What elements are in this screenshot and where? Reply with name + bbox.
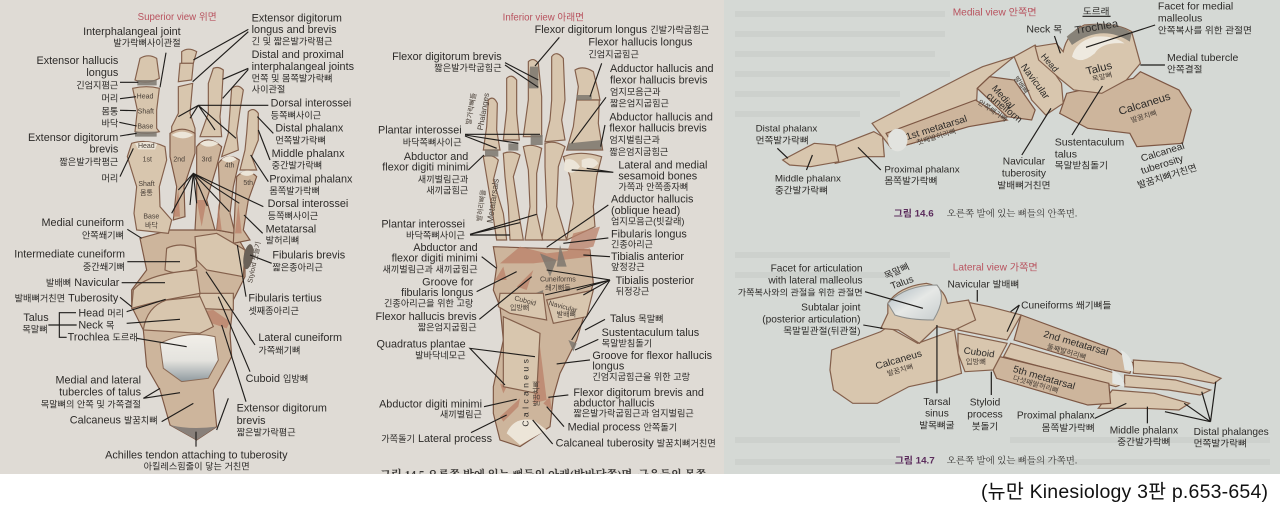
label: styloid process bbox=[967, 372, 1003, 431]
label: subtalar joint: (posterior articulation) bbox=[762, 315, 860, 325]
label: tarsal sinus: 발목뼈굴 bbox=[919, 420, 955, 431]
label: talus bbox=[585, 313, 664, 330]
label: flexor digitorum brevis: 짧은발가락굽힘근 bbox=[434, 62, 502, 73]
label: abductor hallucis and flexor hallucis brevis bbox=[601, 111, 713, 157]
caption: figure 14.7: 오른쪽 발에 있는 뼈들의 가쪽면. bbox=[947, 455, 1077, 465]
label: metatarsal head bbox=[101, 148, 133, 183]
medial foot bones illustration: Head bbox=[1039, 52, 1061, 74]
label: facet for lateral malleolus: Facet for articulation bbox=[771, 264, 863, 274]
lateral foot bones illustration: 입방뼈 bbox=[966, 357, 986, 366]
label: facet for lateral malleolus bbox=[738, 264, 923, 308]
label: tuberosity: 발배뼈거친면 Tuberosity bbox=[15, 293, 119, 305]
medial foot bones illustration: 안쪽쐐기뼈 bbox=[976, 98, 1009, 123]
label: cuboid bbox=[218, 297, 308, 385]
label: calcaneus bbox=[70, 403, 193, 426]
footer white strip bbox=[0, 474, 1280, 514]
label: tibialis posterior: 뒤정강근 bbox=[616, 285, 649, 296]
label: medial and lateral tubercles of talus: tubercles of talus bbox=[59, 387, 142, 399]
label: calcaneal tuberosity: Calcaneal tuberosity 발꿈치뼈거친면 bbox=[556, 438, 716, 450]
superior foot bones illustration: 몸통 bbox=[140, 189, 153, 197]
label: cuboid: Cuboid 입방뼈 bbox=[246, 373, 308, 385]
label: sustentaculum talus: talus bbox=[1055, 150, 1077, 161]
page background: left book page bbox=[0, 0, 724, 474]
label: navicular bbox=[947, 279, 1019, 302]
caption: figure 14.7: 그림 14.7 bbox=[895, 455, 935, 466]
label: navicular: Navicular 발배뼈 bbox=[947, 279, 1019, 290]
label: abductor hallucis and flexor hallucis brevis: 엄지벌림근과 bbox=[609, 134, 660, 145]
inferior foot bones illustration bbox=[464, 54, 603, 447]
label: abductor and flexor digiti minimi lower bbox=[382, 242, 497, 275]
label: adductor hallucis oblique head: Adductor hallucis bbox=[611, 194, 694, 206]
label: fibularis longus: 긴종아리근 bbox=[611, 239, 653, 249]
inferior foot bones illustration: Calcaneus bbox=[521, 356, 531, 427]
medial foot bones illustration: Trochlea bbox=[1074, 18, 1120, 37]
label: cuneiforms: Cuneiforms 쐐기뼈들 bbox=[1021, 300, 1112, 311]
label: medial and lateral tubercles of talus: 목말뼈의 안쪽 및 가쪽결절 bbox=[41, 398, 141, 409]
figure caption clipped at page edge: 그림 14.5 오른쪽 발에 있는 뼈들의 아래(발바닥쪽)면. 근육들의 몸쪽 bbox=[380, 468, 706, 482]
superior foot bones illustration: Shaft bbox=[138, 108, 154, 115]
label: talus: Talus 목말뼈 bbox=[610, 313, 664, 325]
label: plantar interossei upper: 바닥쪽뼈사이근 bbox=[403, 136, 462, 147]
label: facet for lateral malleolus: 가쪽복사와의 관절을 위한 관절면 bbox=[738, 287, 863, 297]
label: proximal phalanx bbox=[1017, 403, 1126, 433]
label: sesamoid bones bbox=[572, 159, 707, 192]
label: sesamoid bones: sesamoid bones bbox=[618, 170, 698, 182]
label: distal phalanges bbox=[1165, 382, 1269, 449]
label: extensor digitorum brevis bbox=[28, 132, 137, 167]
label: middle phalanx: 중간발가락뼈 bbox=[272, 159, 322, 170]
label: flexor digitorum brevis: Flexor digitorum brevis bbox=[392, 51, 502, 63]
label: adductor hallucis oblique head: (oblique head) bbox=[611, 205, 680, 217]
label: quadratus plantae bbox=[377, 339, 535, 385]
label: navicular tuberosity: Navicular bbox=[1003, 157, 1046, 168]
lateral foot bones illustration: 5th metatarsal bbox=[1011, 364, 1076, 392]
label: tarsal sinus: Tarsal bbox=[923, 397, 950, 408]
label: adductor hallucis and flexor hallucis brevis: flexor hallucis brevis bbox=[610, 74, 708, 86]
label: calcaneus: Calcaneus 발꿈치뼈 bbox=[70, 414, 158, 426]
superior foot bones illustration bbox=[127, 49, 258, 440]
label: extensor digitorum brevis: brevis bbox=[89, 143, 119, 155]
lateral foot bones illustration: 발꿈치뼈 bbox=[886, 362, 914, 378]
label: groove for flexor hallucis longus: longus bbox=[592, 361, 625, 373]
label: abductor hallucis and flexor hallucis brevis: Abductor hallucis and bbox=[609, 111, 713, 123]
label: fibularis longus bbox=[563, 229, 687, 249]
lateral foot bones illustration: 목말뼈 bbox=[882, 261, 911, 281]
label: neck bbox=[1026, 24, 1062, 53]
panel: inferior view bbox=[376, 13, 716, 482]
medial foot bones illustration: 발꿈치뼈 bbox=[1129, 108, 1158, 125]
label: abductor digiti minimi: 새끼벌림근 bbox=[440, 409, 482, 420]
label: medial tubercle: Medial tubercle bbox=[1167, 53, 1239, 64]
label: metatarsal: 발허리뼈 bbox=[266, 234, 299, 245]
label: groove for fibularis longus: 긴종아리근을 위한 고랑 bbox=[384, 297, 474, 308]
inferior foot bones illustration: 발허리뼈들 bbox=[474, 188, 488, 222]
label: facet for medial malleolus: 안쪽복사를 위한 관절면 bbox=[1158, 25, 1252, 35]
caption: figure 14.6: 오른쪽 발에 있는 뼈들의 안쪽면. bbox=[947, 208, 1077, 218]
label: groove for fibularis longus bbox=[384, 272, 517, 308]
label: extensor digitorum longus and brevis: longus and brevis bbox=[252, 24, 337, 36]
label: middle phalanx bbox=[258, 130, 345, 170]
label: abductor digiti minimi bbox=[379, 399, 517, 420]
lateral foot bones illustration: Cuboid bbox=[963, 346, 995, 360]
label: medial tubercle: 안쪽결절 bbox=[1167, 64, 1202, 75]
label: facet for medial malleolus bbox=[1086, 2, 1252, 47]
label: flexor digitorum brevis and abductor hallucis bbox=[548, 387, 704, 419]
label: distal and proximal interphalangeal joints: Distal and proximal bbox=[252, 49, 344, 61]
label: facet for medial malleolus: Facet for medial bbox=[1158, 2, 1233, 12]
label: flexor hallucis longus bbox=[588, 36, 693, 97]
heading: superior view: Superior view 위면 bbox=[138, 11, 217, 23]
label: medial cuneiform: 안쪽쐐기뼈 bbox=[82, 229, 124, 240]
label: cuneiforms bbox=[1007, 300, 1112, 332]
label: calcaneal tuberosity: 발꿈치뼈거친면 bbox=[1136, 162, 1198, 190]
label: distal phalanx: 먼쪽발가락뼈 bbox=[275, 134, 326, 145]
label: adductor hallucis and flexor hallucis brevis: Adductor hallucis and bbox=[610, 63, 714, 75]
label: styloid process: Styloid 붓돌기 bbox=[245, 241, 263, 284]
label: fibularis tertius bbox=[237, 245, 322, 316]
medial foot bones illustration: 목말뼈 bbox=[1091, 70, 1113, 84]
lateral foot bones illustration: 다섯째발허리뼈 bbox=[1012, 373, 1060, 395]
label: phalanx head shaft base bbox=[101, 94, 137, 129]
medial foot bones illustration: Navicular bbox=[1018, 62, 1052, 102]
label: subtalar joint: Subtalar joint bbox=[801, 303, 861, 313]
label: dorsal interossei upper: 등쪽뼈사이근 bbox=[271, 109, 321, 120]
label: navicular tuberosity: 발배뼈거친면 bbox=[997, 180, 1051, 190]
label: sustentaculum talus: Sustentaculum talus bbox=[602, 327, 700, 339]
label: abductor and flexor digiti minimi upper bbox=[382, 151, 484, 195]
label: talus head neck trochlea bracket: Trochlea 도르래 bbox=[68, 331, 138, 343]
medial foot bones illustration bbox=[783, 18, 1191, 167]
label: fibularis brevis bbox=[250, 249, 346, 273]
label: quadratus plantae: Quadratus plantae bbox=[377, 339, 466, 351]
label: sesamoid bones: 가쪽과 안쪽종자뼈 bbox=[618, 181, 688, 192]
label: distal and proximal interphalangeal joints: interphalangeal joints bbox=[252, 61, 355, 73]
inferior foot bones illustration: 쐐기뼈들 bbox=[545, 283, 571, 292]
label: flexor digitorum brevis bbox=[392, 51, 538, 87]
label: styloid process: 붓돌기 bbox=[972, 421, 998, 431]
inferior foot bones illustration: 발가락뼈들 bbox=[464, 92, 478, 125]
label: abductor hallucis and flexor hallucis brevis: flexor hallucis brevis bbox=[609, 123, 707, 135]
label: flexor digitorum brevis and abductor hallucis: Flexor digitorum brevis and bbox=[573, 387, 704, 399]
superior foot bones illustration: 1st bbox=[143, 157, 152, 164]
label: flexor digitorum longus bbox=[535, 24, 709, 66]
label: groove for flexor hallucis longus bbox=[557, 350, 713, 382]
label: tibialis posterior bbox=[545, 270, 694, 340]
label: abductor and flexor digiti minimi upper: flexor digiti minimi bbox=[382, 162, 468, 174]
superior foot bones illustration: 5th bbox=[243, 180, 253, 187]
label: sustentaculum talus: 목말받침돌기 bbox=[1055, 160, 1108, 171]
label: middle phalanx bbox=[1110, 407, 1178, 447]
label: tibialis anterior: 앞정강근 bbox=[611, 261, 645, 272]
superior foot bones illustration: 3rd bbox=[202, 157, 212, 164]
medial foot bones illustration: 첫째발허리뼈 bbox=[915, 127, 957, 147]
medial foot bones illustration: Medial bbox=[989, 83, 1016, 111]
label: abductor hallucis and flexor hallucis brevis: 짧은엄지굽힘근 bbox=[609, 146, 668, 157]
label: talus head neck trochlea bracket bbox=[22, 299, 187, 347]
label: sesamoid bones: Lateral and medial bbox=[618, 159, 707, 171]
label: neck: Neck 목 bbox=[1026, 24, 1062, 35]
label: lateral cuneiform: Lateral cuneiform bbox=[258, 332, 342, 344]
medial foot bones illustration: Talus bbox=[1085, 60, 1114, 78]
label: metatarsal head: 머리 bbox=[101, 173, 118, 183]
label: flexor hallucis brevis: Flexor hallucis brevis bbox=[376, 311, 477, 323]
label: calcaneal tuberosity: tuberosity bbox=[1140, 154, 1185, 177]
superior foot bones illustration: Head bbox=[138, 143, 155, 150]
label: abductor and flexor digiti minimi lower: flexor digiti minimi bbox=[392, 253, 478, 265]
label: extensor hallucis longus bbox=[36, 55, 138, 90]
label: abductor and flexor digiti minimi lower: Abductor and bbox=[413, 242, 478, 254]
medial foot bones illustration: 1st metatarsal bbox=[905, 114, 969, 143]
label: subtalar joint bbox=[762, 303, 883, 336]
lateral foot bones illustration: 둘째발허리뼈 bbox=[1046, 342, 1087, 361]
label: fibularis tertius: Fibularis tertius bbox=[248, 293, 322, 305]
label: distal phalanges: 먼쪽발가락뼈 bbox=[1194, 438, 1247, 449]
label: intermediate cuneiform: Intermediate cuneiform bbox=[14, 248, 125, 260]
inferior foot bones illustration: 발배뼈 bbox=[557, 310, 576, 319]
label: abductor and flexor digiti minimi upper: Abductor and bbox=[404, 151, 468, 163]
label: middle phalanx: Middle phalanx bbox=[1110, 426, 1178, 436]
label: proximal phalanx: Proximal phalanx bbox=[269, 173, 353, 185]
label: medial cuneiform bbox=[42, 217, 142, 240]
label: extensor digitorum brevis lower: Extensor digitorum bbox=[237, 402, 327, 414]
label: distal and proximal interphalangeal joints: 사이관절 bbox=[252, 84, 285, 95]
label: middle phalanx bbox=[775, 155, 841, 196]
label: distal phalanges: Distal phalanges bbox=[1194, 427, 1269, 438]
label: extensor hallucis longus: Extensor hallucis bbox=[36, 55, 119, 67]
panel: lateral view bbox=[738, 261, 1269, 466]
inferior foot bones illustration: Phalanges bbox=[476, 92, 491, 131]
superior foot bones illustration: Head bbox=[137, 94, 153, 101]
label: talus head neck trochlea bracket: Head 머리 bbox=[78, 307, 124, 319]
label: proximal phalanx: 몸쪽발가락뼈 bbox=[269, 185, 320, 196]
label: extensor digitorum longus and brevis: 긴 및 짧은발가락폄근 bbox=[252, 36, 333, 47]
inferior foot bones illustration: Navicular bbox=[548, 300, 578, 315]
label: talus head neck trochlea bracket: Neck 목 bbox=[78, 320, 114, 332]
superior foot bones illustration: 2nd bbox=[173, 157, 185, 164]
label: metatarsal: Metatarsal bbox=[266, 224, 316, 236]
label: phalanx head shaft base: 몸통 bbox=[101, 106, 118, 116]
label: navicular: 발배뼈 Navicular bbox=[46, 277, 120, 289]
label: tibialis anterior bbox=[583, 251, 684, 272]
label: abductor and flexor digiti minimi lower: 새끼벌림근과 새끼굽힘근 bbox=[382, 264, 478, 275]
label: proximal phalanx bbox=[858, 147, 960, 186]
label: middle phalanx: 중간발가락뼈 bbox=[1117, 436, 1170, 447]
label: adductor hallucis and flexor hallucis brevis: 엄지모음근과 bbox=[610, 86, 661, 97]
label: distal phalanx bbox=[257, 117, 344, 145]
label: extensor digitorum brevis lower: brevis bbox=[237, 415, 266, 427]
label: quadratus plantae: 발바닥네모근 bbox=[415, 350, 466, 360]
label: fibularis brevis: Fibularis brevis bbox=[272, 249, 346, 261]
label: abductor and flexor digiti minimi upper: 새끼벌림근과 bbox=[418, 174, 469, 185]
label: talus head neck trochlea bracket: Talus bbox=[23, 312, 49, 324]
caption: figure 14.6: 그림 14.6 bbox=[894, 208, 934, 219]
label: medial tubercle bbox=[1140, 53, 1239, 75]
label: fibularis brevis: 짧은종아리근 bbox=[272, 262, 323, 273]
label: flexor hallucis longus: Flexor hallucis longus bbox=[588, 36, 693, 48]
label: achilles tendon: Achilles tendon attaching to tuberosity bbox=[105, 450, 288, 462]
inferior foot bones illustration: Metatarsals bbox=[485, 177, 501, 224]
lateral foot bones illustration: Talus bbox=[889, 274, 915, 292]
label: distal phalanx: Distal phalanx bbox=[275, 123, 344, 135]
label: lateral cuneiform bbox=[206, 272, 342, 356]
label: tibialis anterior: Tibialis anterior bbox=[611, 251, 684, 263]
label: extensor digitorum longus and brevis bbox=[193, 12, 342, 82]
label: phalanx head shaft base: 바닥 bbox=[101, 119, 119, 129]
label: groove for flexor hallucis longus: Groove for flexor hallucis bbox=[592, 350, 713, 362]
label: extensor hallucis longus: 긴엄지폄근 bbox=[76, 79, 118, 90]
label: adductor hallucis oblique head: 엄지모음근(빗갈래) bbox=[611, 215, 684, 226]
label: extensor digitorum brevis lower: 짧은발가락폄근 bbox=[237, 427, 296, 438]
label: styloid process: Styloid bbox=[970, 398, 1000, 409]
label: middle phalanx: Middle phalanx bbox=[272, 148, 345, 160]
label: dorsal interossei upper: Dorsal interossei bbox=[271, 97, 351, 109]
inferior foot bones illustration: 입방뼈 bbox=[510, 303, 529, 312]
label: tarsal sinus: sinus bbox=[925, 409, 949, 420]
label: achilles tendon bbox=[105, 432, 288, 471]
label: plantar interossei upper bbox=[378, 125, 540, 148]
label: groove for fibularis longus: fibularis longus bbox=[401, 287, 474, 299]
label: flexor hallucis brevis: 짧은엄지굽힘근 bbox=[418, 322, 477, 333]
label: flexor hallucis longus: 긴엄지굽힘근 bbox=[588, 48, 639, 59]
label: facet for lateral malleolus: with lateral malleolus bbox=[767, 276, 863, 286]
label: flexor digitorum longus: Flexor digitorum longus 긴발가락굽힘근 bbox=[535, 24, 709, 36]
label: fibularis longus: Fibularis longus bbox=[611, 229, 687, 241]
label: distal phalanx: Distal phalanx bbox=[756, 124, 817, 135]
label: flexor digitorum brevis and abductor hallucis: abductor hallucis bbox=[573, 397, 655, 409]
label: trochlea korean: 도르래 bbox=[1083, 6, 1109, 16]
label: plantar interossei lower: 바닥쪽뼈사이근 bbox=[406, 230, 465, 241]
label: distal and proximal interphalangeal joints bbox=[223, 49, 355, 98]
medial foot bones illustration: Calcaneus bbox=[1117, 91, 1173, 118]
label: medial and lateral tubercles of talus bbox=[41, 375, 180, 409]
label: intermediate cuneiform: 중간쐐기뼈 bbox=[83, 261, 125, 272]
label: styloid process: process bbox=[967, 410, 1003, 421]
panel: superior view bbox=[14, 11, 355, 471]
label: navicular bbox=[46, 277, 165, 289]
label: lateral process: 가쪽돌기 Lateral process bbox=[381, 433, 493, 445]
label: extensor hallucis longus: longus bbox=[86, 67, 119, 79]
label: extensor digitorum brevis: 짧은발가락폄근 bbox=[59, 156, 118, 167]
label: abductor digiti minimi: Abductor digiti minimi bbox=[379, 399, 482, 411]
label: middle phalanx: 중간발가락뼈 bbox=[775, 185, 828, 196]
caption: figure 14.6 bbox=[894, 208, 1077, 219]
label: sustentaculum talus bbox=[1055, 86, 1124, 171]
label: calcaneal tuberosity bbox=[1136, 141, 1198, 190]
lateral foot bones illustration bbox=[830, 261, 1221, 410]
page background: right book page bbox=[724, 0, 1280, 474]
label: groove for fibularis longus: Groove for bbox=[422, 277, 474, 289]
label: distal phalanx bbox=[756, 124, 817, 158]
label: talus head neck trochlea bracket: 목말뼈 bbox=[22, 324, 48, 335]
label: achilles tendon: 아킬레스힘줄이 닿는 거친면 bbox=[144, 460, 250, 471]
label: calcaneal tuberosity bbox=[533, 420, 716, 450]
superior foot bones illustration: 바닥 bbox=[145, 221, 158, 230]
label: middle phalanx: Middle phalanx bbox=[775, 174, 841, 185]
superior foot bones illustration: 4th bbox=[225, 163, 234, 170]
heading: inferior view: Inferior view 아래면 bbox=[503, 13, 584, 24]
label: proximal phalanx: 몸쪽발가락뼈 bbox=[1042, 422, 1095, 433]
superior foot bones illustration: Base bbox=[143, 214, 159, 221]
label: facet for medial malleolus: malleolus bbox=[1158, 14, 1202, 24]
label: extensor digitorum brevis lower bbox=[222, 325, 327, 438]
label: adductor hallucis and flexor hallucis brevis bbox=[572, 63, 714, 143]
label: sustentaculum talus: Sustentaculum bbox=[1055, 138, 1124, 149]
label: dorsal interossei upper bbox=[178, 97, 351, 138]
label: metatarsal bbox=[244, 215, 316, 245]
label: flexor digitorum brevis and abductor hallucis: 짧은발가락굽힘근과 엄지벌림근 bbox=[573, 408, 694, 419]
label: medial process bbox=[547, 407, 677, 433]
label: lateral process bbox=[381, 415, 507, 445]
label: plantar interossei upper: Plantar interossei bbox=[378, 125, 462, 137]
label: groove for flexor hallucis longus: 긴엄지굽힘근을 위한 고랑 bbox=[592, 371, 691, 382]
label: proximal phalanx bbox=[251, 155, 353, 196]
superior foot bones illustration: Base bbox=[137, 123, 153, 130]
inferior foot bones illustration: 발꿈치뼈 bbox=[532, 381, 541, 407]
label: extensor digitorum brevis: Extensor digitorum bbox=[28, 132, 118, 144]
label: phalanx head shaft base: 머리 bbox=[101, 94, 118, 104]
label: proximal phalanx: 몸쪽발가락뼈 bbox=[884, 175, 937, 186]
label: interphalangeal joint bbox=[83, 26, 181, 87]
label: proximal phalanx: Proximal phalanx bbox=[884, 165, 960, 175]
label: adductor hallucis and flexor hallucis brevis: 짧은엄지굽힘근 bbox=[610, 98, 669, 109]
label: adductor hallucis oblique head bbox=[547, 194, 694, 247]
label: medial cuneiform: Medial cuneiform bbox=[42, 217, 124, 229]
label: flexor hallucis brevis bbox=[376, 277, 532, 333]
superior foot bones illustration: Shaft bbox=[138, 181, 155, 188]
label: sustentaculum talus: 목말받침돌기 bbox=[602, 338, 652, 349]
inferior foot bones illustration: Cuneiforms bbox=[540, 277, 576, 284]
panel: medial view bbox=[756, 2, 1252, 219]
label: tibialis posterior: Tibialis posterior bbox=[616, 275, 694, 287]
label: navicular tuberosity: tuberosity bbox=[1002, 169, 1046, 180]
label: fibularis tertius: 셋째종아리근 bbox=[248, 306, 299, 316]
medial foot bones illustration: cuneiform bbox=[984, 91, 1024, 125]
heading: medial view: Medial view 안쪽면 bbox=[953, 7, 1037, 18]
inferior foot bones illustration: Cuboid bbox=[513, 295, 537, 308]
label: plantar interossei lower bbox=[381, 214, 537, 241]
label: tarsal sinus bbox=[919, 325, 955, 431]
label: sustentaculum talus bbox=[575, 327, 700, 350]
label: interphalangeal joint: Interphalangeal joint bbox=[83, 26, 181, 38]
label: distal phalanx: 먼쪽발가락뼈 bbox=[756, 135, 809, 146]
label: abductor and flexor digiti minimi upper: 새끼굽힘근 bbox=[426, 185, 468, 195]
label: dorsal interossei lower: Dorsal interossei bbox=[268, 198, 348, 210]
heading: lateral view: Lateral view 가쪽면 bbox=[953, 262, 1038, 274]
label: intermediate cuneiform bbox=[14, 248, 180, 272]
label: dorsal interossei lower bbox=[172, 173, 348, 221]
label: navicular tuberosity bbox=[997, 108, 1051, 190]
source citation: (뉴만 Kinesiology 3판 p.653-654) bbox=[981, 481, 1268, 503]
label: extensor digitorum longus and brevis: Extensor digitorum bbox=[252, 12, 342, 24]
label: medial and lateral tubercles of talus: Medial and lateral bbox=[56, 375, 141, 387]
medial foot bones illustration: 발배뼈 bbox=[1012, 74, 1031, 95]
label: lateral cuneiform: 가쪽쐐기뼈 bbox=[258, 345, 300, 356]
label: subtalar joint: 목말밑관절(뒤관절) bbox=[783, 325, 860, 336]
label: distal and proximal interphalangeal joints: 먼쪽 및 몸쪽발가락뼈 bbox=[252, 73, 333, 84]
label: calcaneal tuberosity: Calcaneal bbox=[1140, 141, 1186, 164]
caption: figure 14.7 bbox=[895, 455, 1077, 466]
label: proximal phalanx: Proximal phalanx bbox=[1017, 411, 1095, 421]
lateral foot bones illustration: Calcaneus bbox=[874, 349, 923, 372]
label: interphalangeal joint: 발가락뼈사이관절 bbox=[113, 37, 181, 48]
label: dorsal interossei lower: 등쪽뼈사이근 bbox=[268, 210, 318, 221]
label: plantar interossei lower: Plantar interossei bbox=[381, 219, 465, 231]
label: medial process: Medial process 안쪽돌기 bbox=[568, 421, 677, 433]
lateral foot bones illustration: 2nd metatarsal bbox=[1042, 329, 1110, 358]
